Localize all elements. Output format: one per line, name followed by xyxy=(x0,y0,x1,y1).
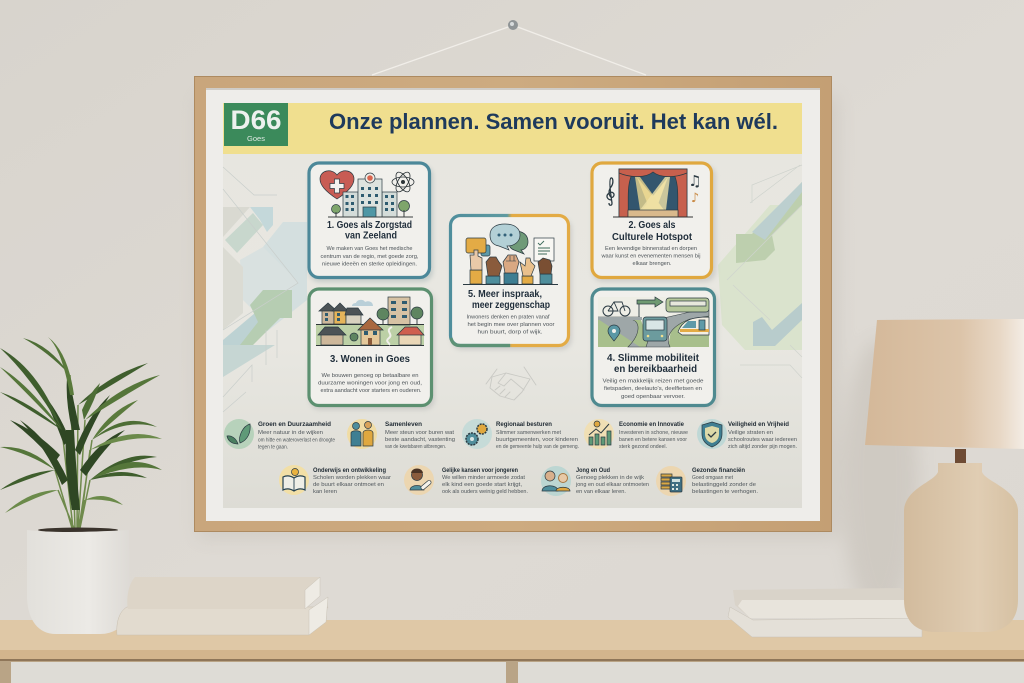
icon: houses xyxy=(316,297,424,346)
card 2 heading xyxy=(612,220,693,243)
item: Samenleven: beste aandacht, vastenting xyxy=(385,437,455,443)
item: Economie en Innovatie: banen en betere kansen voor xyxy=(619,437,687,443)
card 2 text: waar kunst en evenementen mensen bij xyxy=(600,254,700,260)
icon: raised hands and speech bubbles xyxy=(463,224,558,284)
item: Economie en Innovatie: Investeren in schone, nieuwe xyxy=(619,430,688,436)
card 2: Culturele Hotspot xyxy=(592,163,716,282)
item: Gezonde financiën: belastingen te verhogen. xyxy=(692,489,759,495)
item: Groen en Duurzaamheid: tegen te gaan. xyxy=(258,444,288,450)
item: Veiligheid en Vrijheid: zich altijd zonder pijn mogen. xyxy=(728,444,797,450)
item: Samenleven: van de kwetsbaren uitbrengen. xyxy=(385,444,446,450)
card 5 text: Inwoners denken en praten vanaf xyxy=(466,314,550,320)
hanging string and nail xyxy=(372,20,646,75)
item: Regionaal besturen: Slimmer samenwerken met xyxy=(496,430,561,436)
right background arrows xyxy=(718,165,802,378)
card 5 heading: meer zeggenschap xyxy=(472,300,550,311)
books right xyxy=(728,588,922,637)
item: Regionaal besturen: Regionaal besturen xyxy=(496,421,552,428)
card 4 heading: en bereikbaarheid xyxy=(614,364,697,375)
card 1 text xyxy=(320,246,419,268)
card 3 text: extra aandacht voor starters en ouderen. xyxy=(320,388,422,394)
card 5: Meer inspraak xyxy=(450,216,572,350)
picture frame xyxy=(194,76,832,532)
item: Samenleven xyxy=(347,419,455,450)
card 3 text xyxy=(318,373,423,394)
poster background xyxy=(223,103,802,508)
item: Gelijke kansen voor jongeren xyxy=(404,465,528,495)
item: Jong en Oud: jong en oud elkaar ontmoeten xyxy=(575,482,649,488)
icon: bike, bus and train xyxy=(598,297,709,347)
plant xyxy=(0,337,162,634)
poster xyxy=(223,103,802,508)
handshake icon xyxy=(486,367,536,400)
logo D66 Goes xyxy=(224,103,288,146)
item: Gezonde financiën: Gezonde financiën xyxy=(692,467,745,474)
icon: hospital with heart and atom xyxy=(320,170,414,217)
item: Jong en Oud xyxy=(541,466,649,496)
item: Economie en Innovatie xyxy=(584,419,688,450)
card 2 text xyxy=(600,246,700,267)
books left xyxy=(117,577,328,635)
item: Groen en Duurzaamheid: Groen en Duurzaamheid xyxy=(258,421,331,428)
card 4: Slimme mobiliteit xyxy=(592,289,718,410)
item: Economie en Innovatie: Economie en Innovatie xyxy=(619,421,685,428)
item: Regionaal besturen: en de gemeente hulp van de gemeng. xyxy=(496,444,579,450)
item: Gezonde financiën: Goed omgaan met xyxy=(692,475,733,481)
logo D66 Goes: Goes xyxy=(247,134,265,143)
card 1 heading xyxy=(327,220,412,242)
item: Regionaal besturen xyxy=(462,419,579,450)
card 5 text: hun buurt, dorp of wijk. xyxy=(478,330,543,336)
card 4 text: goed openbaar vervoer. xyxy=(621,394,686,400)
item: Veiligheid en Vrijheid xyxy=(697,419,797,450)
item: Groen en Duurzaamheid: Meer natuur in de wijken xyxy=(258,430,323,436)
item: Onderwijs en ontwikkeling: kan leren xyxy=(313,489,337,495)
item: Onderwijs en ontwikkeling xyxy=(279,465,391,495)
item: Jong en Oud: en van elkaar leren. xyxy=(576,489,626,495)
card 1 heading: 1. Goes als Zorgstad xyxy=(327,220,412,231)
item: Gelijke kansen voor jongeren: Gelijke kansen voor jongeren xyxy=(442,467,518,474)
item: Onderwijs en ontwikkeling: Onderwijs en ontwikkeling xyxy=(313,467,386,474)
item: Onderwijs en ontwikkeling: Scholen worden plekken waar xyxy=(313,475,391,481)
icon: theatre stage: ♫ xyxy=(688,172,702,190)
card 4 text xyxy=(602,378,704,400)
card 1 heading: van Zeeland xyxy=(345,230,397,242)
card 5 heading xyxy=(468,289,550,311)
plant stems xyxy=(55,375,92,528)
plant outer leaves xyxy=(0,337,162,513)
item: Economie en Innovatie: sterk gezond ondeel. xyxy=(619,444,667,450)
table lamp xyxy=(865,319,1024,632)
item: Gelijke kansen voor jongeren: We willen minder armoede zodat xyxy=(442,475,525,481)
banner xyxy=(223,103,802,154)
card 4 heading xyxy=(607,353,700,375)
card 4 text: Veilig en makkelijk reizen met goede xyxy=(602,378,704,384)
card 1 text: nieuwe ideeën en sterke opleidingen. xyxy=(322,262,417,268)
card 4 text: fietspaden, deelauto's, deelfietsen en xyxy=(604,386,702,392)
sideboard xyxy=(0,620,1024,683)
card 4 heading: 4. Slimme mobiliteit xyxy=(607,353,700,364)
card 5 text: het begin mee over plannen voor xyxy=(468,322,555,328)
card 5 heading: 5. Meer inspraak, xyxy=(468,289,542,300)
item: Veiligheid en Vrijheid: Veilige straten en xyxy=(728,430,773,436)
card 2 text: elkaar brengen. xyxy=(632,261,672,267)
item: Veiligheid en Vrijheid: schoolroutes waar iedereen xyxy=(728,437,797,443)
item: Onderwijs en ontwikkeling: de buurt elkaar ontmoet en xyxy=(313,482,384,488)
item: Samenleven: Samenleven xyxy=(385,421,422,428)
left background arrows xyxy=(223,167,307,412)
card 2 text: Een levendige binnenstad en dorpen xyxy=(605,246,697,252)
title: Onze plannen. Samen vooruit. Het kan wél. xyxy=(329,109,778,134)
card 2 heading: Culturele Hotspot xyxy=(612,232,693,243)
card 5 text xyxy=(466,314,555,336)
plant inner leaves xyxy=(10,370,125,510)
card 1 text: We maken van Goes het medische xyxy=(326,246,412,252)
lamp base xyxy=(904,463,1018,632)
card 3 heading: 3. Wonen in Goes xyxy=(330,354,410,365)
plant pot xyxy=(27,528,130,634)
item: Veiligheid en Vrijheid: Veiligheid en Vrijheid xyxy=(728,421,789,428)
item: Jong en Oud: Jong en Oud xyxy=(576,467,610,474)
icon: theatre stage xyxy=(607,169,702,217)
item: Gelijke kansen voor jongeren: elk kind een goede start krijgt, xyxy=(442,482,523,488)
item: Samenleven: Meer steun voor buren wat xyxy=(385,430,454,436)
lamp shade xyxy=(865,319,1024,449)
card 3: Wonen in Goes xyxy=(309,289,435,410)
item: Gezonde financiën xyxy=(656,466,759,496)
item: Gezonde financiën: belastinggeld zonder de xyxy=(692,482,756,488)
card 1: Zorgstad xyxy=(309,163,433,282)
card 2 heading: 2. Goes als xyxy=(628,220,676,231)
item: Gelijke kansen voor jongeren: ook als ouders weinig geld hebben. xyxy=(442,489,528,495)
item: Regionaal besturen: buurtgemeenten, voor kinderen xyxy=(496,437,578,443)
logo D66 Goes: D66 xyxy=(230,105,282,135)
item: Groen en Duurzaamheid: om hitte en wateroverlast en droogte xyxy=(258,438,335,444)
card 3 text: duurzame woningen voor jong en oud, xyxy=(318,380,423,386)
lamp stem xyxy=(955,449,966,463)
card 3 text: We bouwen genoeg op betaalbare en xyxy=(322,373,418,379)
wall shadows xyxy=(198,96,918,620)
item: Groen en Duurzaamheid xyxy=(224,419,335,450)
card 1 text: centrum van de regio, met goede zorg, xyxy=(320,254,419,260)
item: Jong en Oud: Genoeg plekken in de wijk xyxy=(576,475,644,481)
icon: theatre stage: ♪ xyxy=(691,191,699,206)
